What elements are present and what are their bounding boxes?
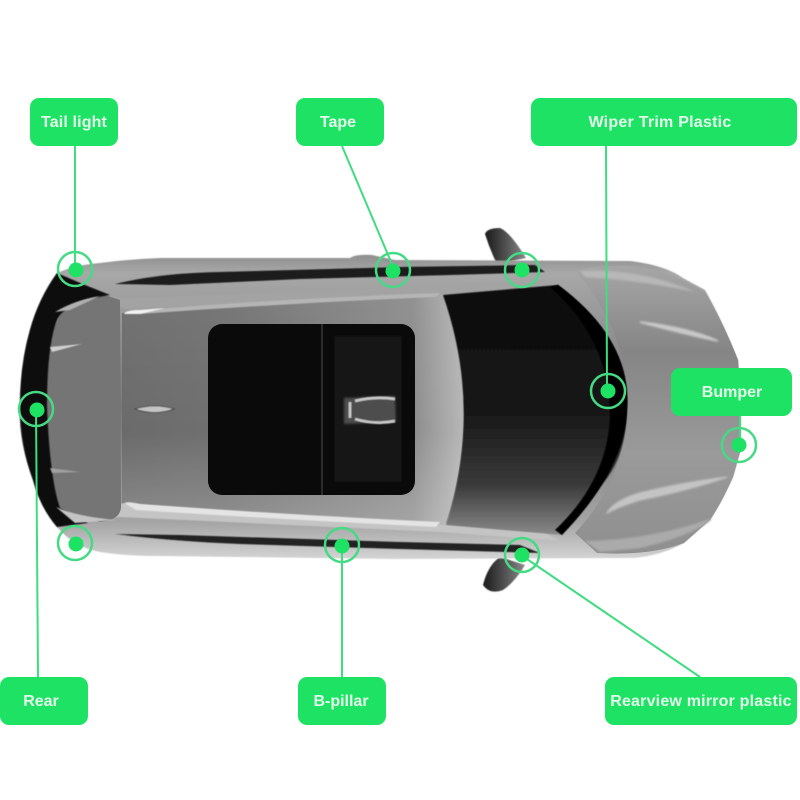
label: bumper xyxy=(671,368,792,416)
label: rear xyxy=(0,677,88,725)
label: tail light xyxy=(30,98,118,146)
rear highlights xyxy=(50,296,115,523)
marker: rear lamp lower xyxy=(58,526,92,560)
icon: upper wing mirror xyxy=(485,228,526,264)
label: rearview mirror plastic: Rearview mirror plastic xyxy=(610,693,792,710)
windshield xyxy=(443,285,627,535)
icon: interior seat xyxy=(344,396,396,424)
label: bumper: Bumper xyxy=(702,384,762,401)
label: b-pillar xyxy=(298,677,386,725)
label: tail light: Tail light xyxy=(41,114,108,131)
car top view xyxy=(20,228,741,592)
door handle xyxy=(135,406,174,412)
marker: tape xyxy=(376,253,410,287)
roof xyxy=(122,294,464,525)
lower body band xyxy=(62,503,560,541)
label: b-pillar: B-pillar xyxy=(313,693,369,710)
icon: lower wing mirror xyxy=(483,557,525,592)
marker: rear xyxy=(19,392,53,426)
hood xyxy=(575,266,741,554)
label: rearview mirror plastic xyxy=(605,677,797,725)
marker: mirror top xyxy=(505,253,539,287)
car body xyxy=(20,255,741,559)
marker: mirror bottom xyxy=(505,538,539,572)
windshield black trim xyxy=(550,285,627,535)
roof rail top xyxy=(124,293,440,314)
upper sill dark strip xyxy=(115,265,545,285)
rear black window band xyxy=(20,273,110,527)
marker: tail light xyxy=(58,252,92,286)
roof rail bottom xyxy=(124,502,440,527)
upper body band xyxy=(60,281,560,309)
sunroof xyxy=(208,324,415,495)
marker: wiper trim xyxy=(591,374,625,408)
leader lines xyxy=(36,146,740,677)
marker: b-pillar xyxy=(325,528,359,562)
marker: bumper xyxy=(722,428,756,462)
label: wiper trim plastic xyxy=(531,98,797,146)
label: wiper trim plastic: Wiper Trim Plastic xyxy=(588,114,732,131)
lower sill dark strip xyxy=(115,534,540,553)
label: tape xyxy=(296,98,384,146)
label: rear: Rear xyxy=(23,693,59,710)
label: tape: Tape xyxy=(320,114,356,131)
tailgate xyxy=(46,295,121,522)
hood highlights xyxy=(580,271,727,552)
